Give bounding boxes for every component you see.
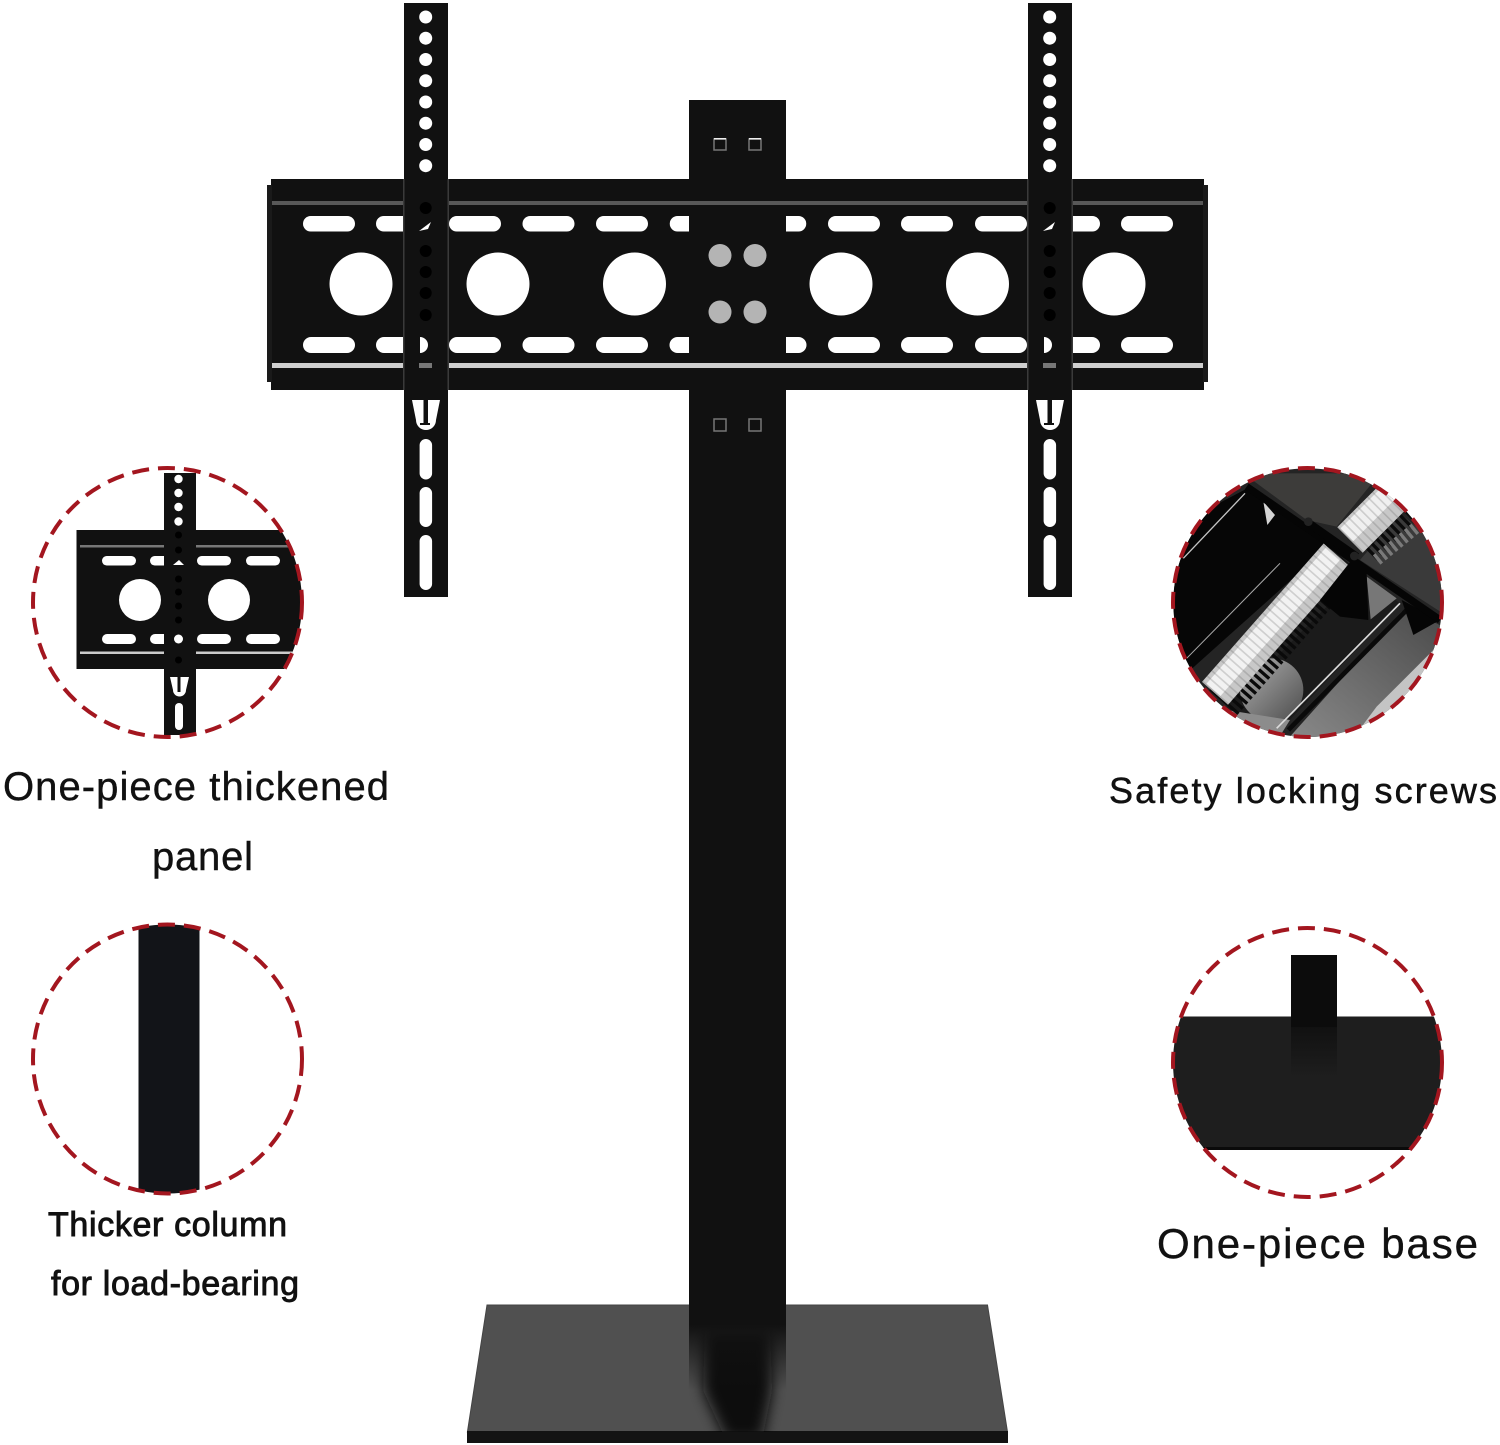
callout image: panel detail xyxy=(76,473,316,735)
label: thicker column for load-bearing: Thicker column xyxy=(48,1206,287,1244)
lower rod section xyxy=(1213,553,1347,703)
label: thicker column for load-bearing xyxy=(48,1206,299,1303)
label: safety locking screws: Safety locking screws xyxy=(1109,770,1497,811)
label: one-piece thickened panel: One-piece thickened xyxy=(3,765,389,809)
callout: one-piece thickened panel xyxy=(33,468,316,737)
callout image: base detail xyxy=(1170,955,1450,1150)
callout: safety locking screws xyxy=(1171,466,1444,739)
label: one-piece thickened panel xyxy=(3,765,389,879)
callout image: column detail xyxy=(138,920,200,1200)
vertical column xyxy=(689,100,786,1390)
label: thicker column for load-bearing: for load-bearing xyxy=(51,1265,299,1303)
callout image: threaded screw detail xyxy=(1173,468,1442,737)
callout: thicker column xyxy=(33,920,302,1200)
label: one-piece thickened panel: panel xyxy=(152,835,253,879)
right vertical bracket xyxy=(1027,3,1073,597)
upper rod section xyxy=(1347,480,1423,560)
base plate xyxy=(467,1305,1008,1443)
callout: one-piece base xyxy=(1170,928,1450,1197)
TV stand product illustration xyxy=(267,3,1208,1443)
label: one-piece base: One-piece base xyxy=(1157,1220,1478,1267)
mounting plate xyxy=(267,179,1208,390)
left vertical bracket xyxy=(403,3,449,597)
